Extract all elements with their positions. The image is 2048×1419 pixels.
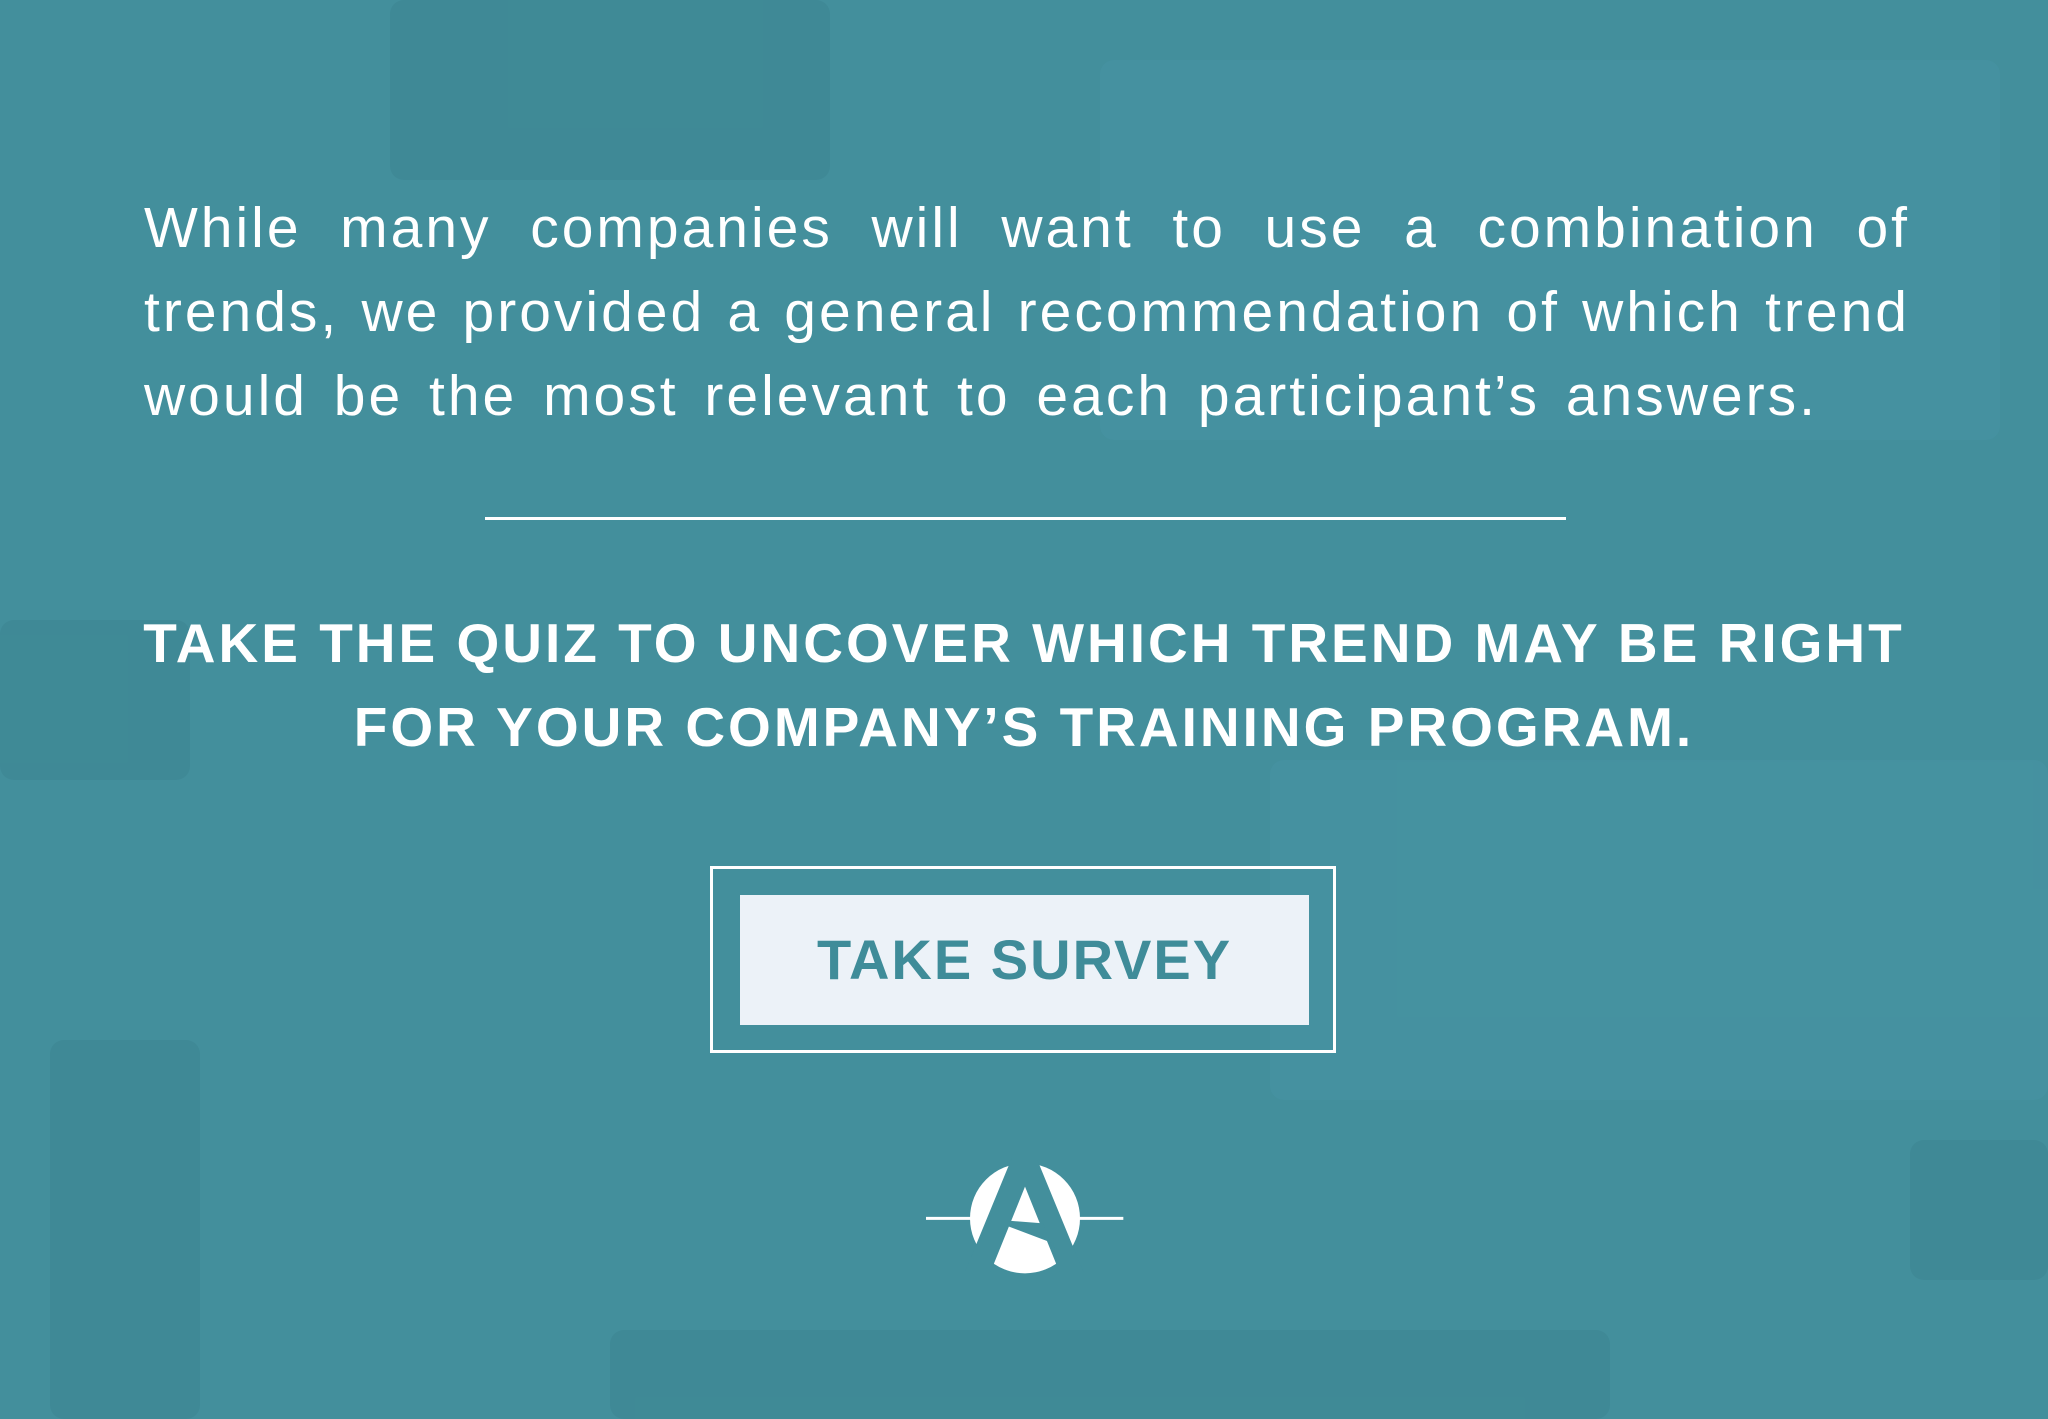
intro paragraph [144,196,1910,428]
call to action heading: TAKE THE QUIZ TO UNCOVER WHICH TREND MAY BE RIGHT [143,612,1905,674]
icon: logo [926,1165,1124,1274]
button: take survey [710,866,1336,1053]
intro paragraph: would be the most relevant to each participant’s answers. [144,364,1818,428]
button: take survey: TAKE SURVEY [817,928,1232,991]
call to action heading [143,612,1905,758]
call to action heading: FOR YOUR COMPANY’S TRAINING PROGRAM. [354,696,1694,758]
intro paragraph: While many companies will want to use a combination of [144,196,1910,260]
intro paragraph: trends, we provided a general recommendation of which trend [144,280,1910,344]
